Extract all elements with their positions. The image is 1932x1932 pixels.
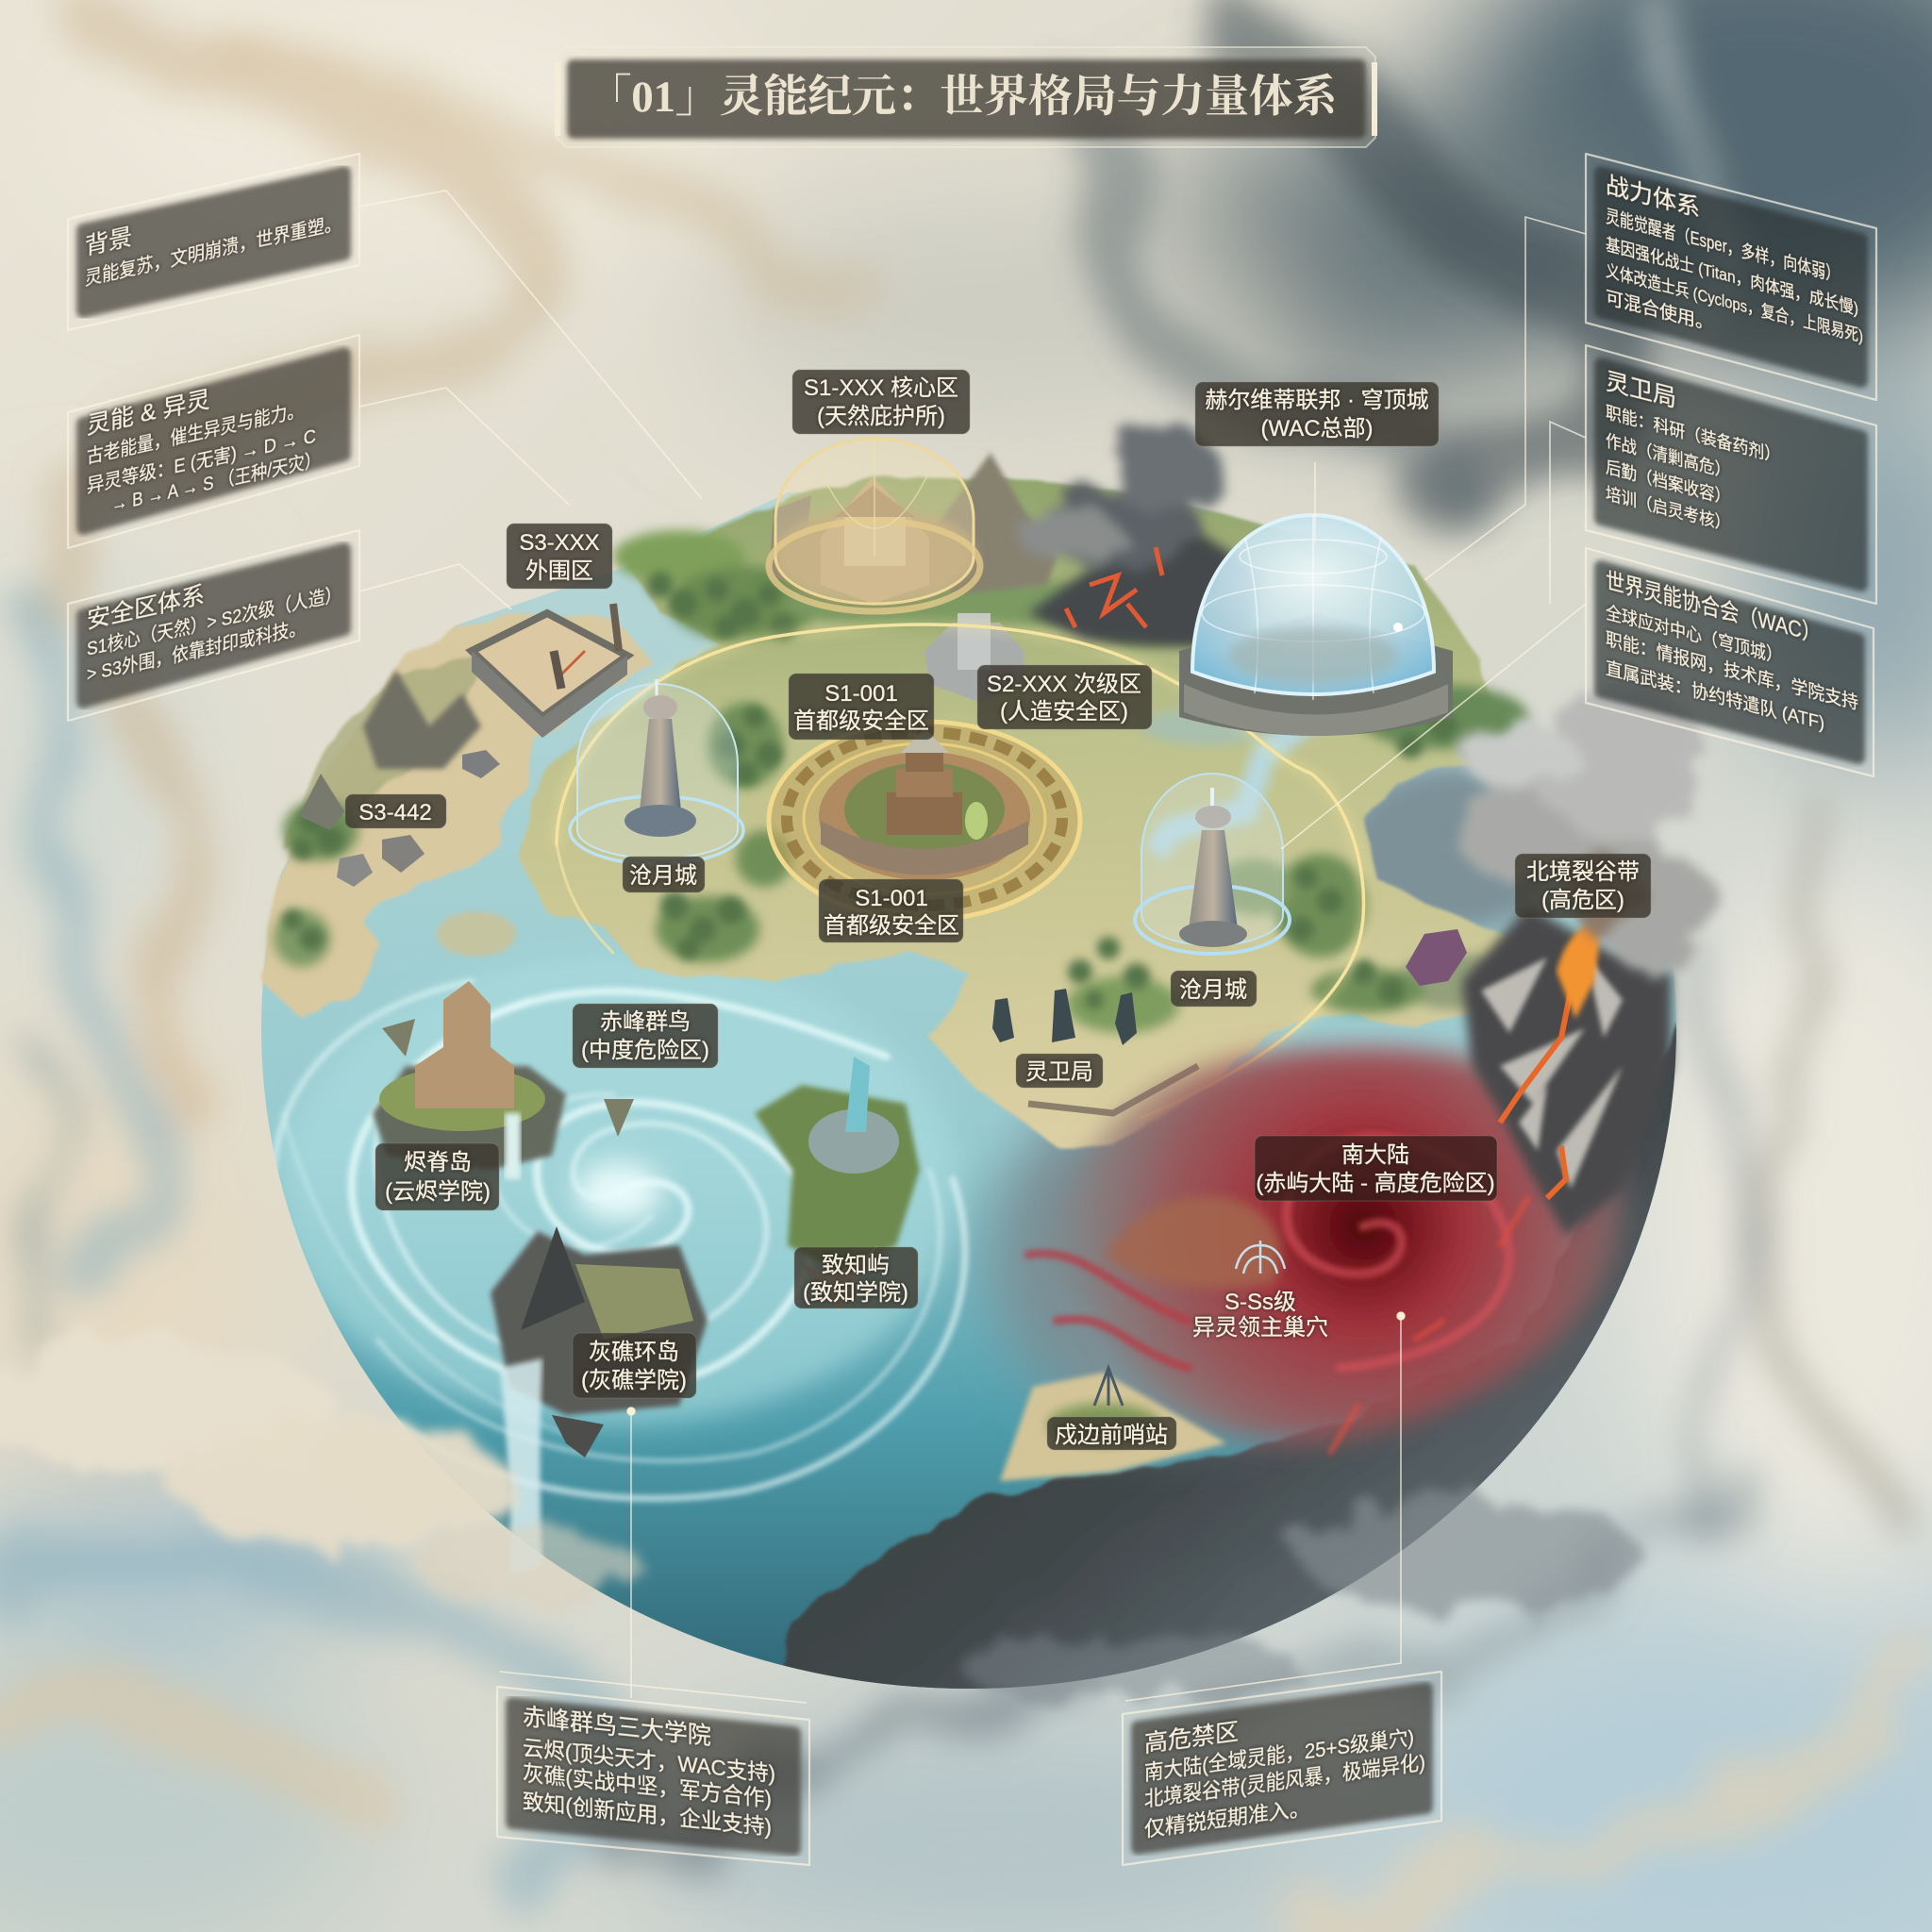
label: S-Ss lord nest: S-Ss级: [1224, 1290, 1296, 1315]
island: Zhizhi: [755, 1057, 920, 1311]
label: S1-001 lower: 首都级安全区: [824, 913, 959, 939]
panel: restricted zones: 高危禁区: [1144, 1719, 1239, 1757]
label: S3-XXX: 外围区: [525, 558, 593, 584]
label: S1-001 upper: [789, 674, 934, 740]
label: S1-XXX core: (天然庇护所): [817, 404, 945, 429]
panel: Lingwei bureau: 培训（启灵考核）: [1606, 483, 1730, 535]
purple beast: [1406, 929, 1467, 986]
label: S2-XXX: [977, 665, 1152, 729]
label: Chifeng archipelago: (中度危险区): [581, 1038, 709, 1063]
panel: WAC: [1586, 548, 1874, 776]
label: Huijiao ring island: (灰礁学院): [581, 1368, 687, 1393]
label: Lingwei bureau: [1016, 1054, 1103, 1088]
label: Lingwei bureau: 灵卫局: [1025, 1059, 1093, 1085]
label: Chifeng archipelago: [573, 1004, 718, 1068]
label: Helvetia Dome City: (WAC总部): [1260, 416, 1374, 441]
island: Huijiao: [491, 1226, 708, 1575]
panel: safe zone system: S1核心（天然）> S2次级（人造）: [87, 583, 341, 660]
title banner: 「01」灵能纪元：世界格局与力量体系: [587, 73, 1338, 122]
panel: WAC: 直属武装：协约特遣队 (ATF): [1606, 658, 1824, 734]
label: Helvetia Dome City: 赫尔维蒂联邦 · 穹顶城: [1205, 388, 1429, 413]
label: S1-XXX core: S1-XXX 核心区: [804, 375, 958, 401]
panel: combat system: 基因强化战士 (Titan，肉体强，成长慢): [1606, 234, 1858, 319]
label: S3-442: S3-442: [358, 800, 432, 825]
panel: Lingwei bureau: 作战（清剿高危）: [1606, 430, 1730, 482]
panel: safe zone system: 安全区体系: [87, 582, 205, 634]
alien lord nest icon: [1236, 1241, 1285, 1274]
label: S3-XXX: [507, 524, 612, 589]
connector lines: [359, 191, 1586, 1703]
label: S3-XXX: S3-XXX: [519, 530, 600, 556]
panel: combat system: 战力体系: [1606, 172, 1700, 222]
panel: WAC: 世界灵能协合会（WAC）: [1606, 568, 1821, 648]
label: Zhizhi islet: (致知学院): [803, 1280, 908, 1306]
panel: three academies: 赤峰群鸟三大学院: [523, 1704, 711, 1750]
panel: psionics and anomalies: 灵能 & 异灵: [87, 387, 210, 440]
panel: psionics and anomalies: → B → A → S （王种/天灾）: [111, 448, 321, 516]
label: Zhizhi islet: 致知屿: [822, 1253, 890, 1278]
label: frontier outpost: [1047, 1417, 1176, 1450]
vegetation patches: [274, 530, 1528, 1033]
northern white citadel: [924, 613, 1024, 703]
Cangyue tower east: [1135, 774, 1290, 954]
outpost fortress S3-XXX: [472, 604, 627, 738]
label: S3-442: [345, 794, 446, 828]
label: Helvetia Dome City: [1195, 382, 1439, 446]
shore bay inlet: [437, 911, 516, 957]
mountain and S1 core region: [769, 439, 1057, 611]
panel: three academies: 云烬(顶尖天才，WAC支持): [523, 1735, 775, 1786]
panel: background: 灵能复苏，文明崩溃，世界重塑。: [85, 211, 341, 290]
panel: combat system: 义体改造士兵 (Cyclops，复合，上限易死): [1606, 260, 1863, 346]
label: Cangyue west: 沧月城: [629, 863, 697, 889]
Cangyue tower west: [570, 679, 743, 864]
panel: combat system: [1586, 154, 1876, 400]
panel: psionics and anomalies: 异灵等级：E (无害) → D → C: [87, 425, 316, 497]
label: S-Ss lord nest: [1192, 1290, 1328, 1341]
volcano north rift: [1453, 689, 1717, 1236]
panel: psionics and anomalies: [68, 335, 359, 548]
label: South continent: [1255, 1136, 1497, 1201]
panel: psionics and anomalies: 古老能量，催生异灵与能力。: [87, 399, 304, 468]
panel: three academies: [497, 1687, 809, 1865]
label: S2-XXX: S2-XXX 次级区: [987, 672, 1141, 697]
label: Cangyue east: [1171, 971, 1257, 1007]
panel: three academies: 致知(创新应用，企业支持): [523, 1789, 772, 1840]
panel: three academies: 灰礁(实战中坚，军方合作): [523, 1760, 772, 1811]
label: South continent: (赤屿大陆 - 高度危险区): [1256, 1171, 1495, 1196]
label: Northern Rift: (高危区): [1541, 888, 1624, 913]
label: Jinji island: 烬脊岛: [404, 1150, 472, 1175]
label: Jinji island: (云烬学院): [385, 1179, 491, 1205]
panel: WAC: 全球应对中心（穹顶城）: [1606, 602, 1782, 668]
panel: background: 背景: [85, 224, 132, 260]
panel: combat system: 灵能觉醒者（Esper，多样，向体弱）: [1606, 206, 1840, 286]
golden safe-zone ring: [557, 625, 1364, 1118]
volcano smoke cloud north: [1014, 429, 1264, 651]
WAC glass dome: [1179, 515, 1453, 736]
label: Zhizhi islet: [794, 1247, 918, 1308]
outpost island south: [1000, 1368, 1226, 1481]
label: S1-001 upper: 首都级安全区: [793, 708, 929, 734]
label: S1-001 lower: [819, 879, 963, 942]
label: South continent: 南大陆: [1341, 1142, 1409, 1168]
tree clusters: [282, 572, 1483, 1009]
label: S2-XXX: (人造安全区): [1000, 699, 1128, 724]
west island S3: [261, 613, 651, 1019]
label: Northern Rift: [1515, 854, 1651, 918]
soldiers: [992, 989, 1137, 1045]
label: frontier outpost: 戍边前哨站: [1055, 1423, 1168, 1448]
panel: background: [68, 154, 359, 330]
island: Jinji: [373, 981, 634, 1179]
panel: restricted zones: 北境裂谷带(灵能风暴，极端异化): [1144, 1750, 1425, 1811]
north landmass: [519, 476, 1547, 1146]
panel: combat system: 可混合使用。: [1606, 287, 1713, 335]
label: Cangyue east: 沧月城: [1179, 977, 1247, 1003]
capital city S1-001 with rune ring: [769, 722, 1080, 920]
foreground smoke over disc edge: [0, 1340, 1641, 1698]
south fence: [1028, 1066, 1198, 1113]
label: S1-XXX core: [792, 370, 970, 434]
label: Chifeng archipelago: 赤峰群鸟: [600, 1009, 691, 1035]
label: S-Ss lord nest: 异灵领主巢穴: [1192, 1315, 1328, 1341]
west mountains and huts: [299, 670, 500, 887]
sea: spiral vortex currents: [274, 953, 965, 1499]
world disc: sea and rock base: [255, 492, 1698, 1698]
panel: WAC: 职能：情报网，技术库，学院支持: [1606, 628, 1858, 714]
panel: restricted zones: 南大陆(全域灵能，25+S级巢穴): [1144, 1725, 1414, 1785]
title banner: [555, 47, 1377, 147]
label: Huijiao ring island: 灰礁环岛: [589, 1340, 679, 1365]
label: S1-001 upper: S1-001: [824, 681, 898, 707]
panel: restricted zones: [1123, 1672, 1441, 1865]
panel: Lingwei bureau: 后勤（档案收容）: [1606, 457, 1730, 508]
panel: restricted zones: 仅精锐短期准入。: [1144, 1796, 1310, 1841]
panel: Lingwei bureau: 职能：科研（装备药剂）: [1606, 402, 1780, 466]
red storm south continent: [1028, 1047, 1624, 1453]
panel: Lingwei bureau: [1586, 345, 1876, 604]
label: Northern Rift: 北境裂谷带: [1526, 859, 1640, 885]
panel: safe zone system: > S3外围，依靠封印或科技。: [87, 616, 306, 686]
label: Cangyue west: [623, 857, 705, 892]
label: Huijiao ring island: [573, 1333, 696, 1398]
label: S1-001 lower: S1-001: [855, 886, 928, 911]
panel: safe zone system: [68, 530, 359, 721]
panel: Lingwei bureau: 灵卫局: [1606, 368, 1676, 412]
label: Jinji island: [375, 1143, 499, 1210]
